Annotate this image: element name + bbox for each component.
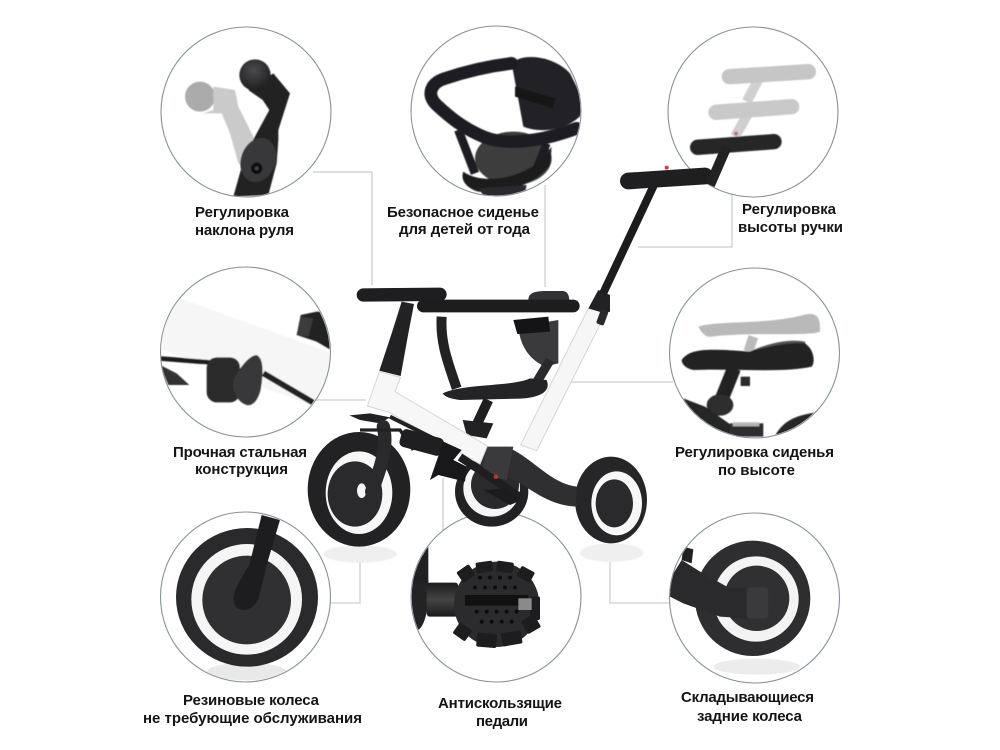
handlebar: [363, 274, 440, 315]
label: rubber wheels: не требующие обслуживания: [143, 710, 362, 727]
panel: seat height adjustment: [670, 268, 840, 479]
circle: handlebar tilt: [161, 27, 331, 197]
push pole tube: [521, 308, 606, 451]
middle wheel: [455, 457, 528, 527]
label: handlebar tilt: Регулировка: [195, 204, 290, 221]
label: steel frame: [173, 444, 307, 478]
seat back: [513, 291, 569, 385]
label: safe seat: [387, 204, 539, 238]
seat stem: [463, 400, 493, 438]
pedal and linkage: [398, 428, 522, 505]
circle: steel frame: [157, 267, 337, 437]
front fork: [349, 413, 440, 492]
main illustration: tricycle: [308, 176, 705, 563]
label: handlebar tilt: наклона руля: [195, 222, 294, 239]
label: safe seat: для детей от года: [399, 221, 531, 238]
label: handlebar tilt: [195, 204, 294, 239]
panel: rubber wheels: [143, 512, 362, 727]
label: rear wheels: [681, 689, 814, 725]
label: handle height: Регулировка: [742, 201, 837, 218]
circle: rear wheel: [667, 513, 840, 683]
label: steel frame: Прочная стальная: [173, 444, 307, 461]
label: rear wheels: задние колеса: [697, 708, 803, 725]
push pole: [588, 185, 654, 326]
rear wheel: [575, 457, 647, 543]
steering column: [379, 302, 414, 376]
panel: folding rear wheels: [667, 513, 840, 725]
seat base: [443, 378, 548, 400]
label: seat height: Регулировка сиденья: [675, 444, 834, 461]
label: safe seat: Безопасное сиденье: [387, 204, 539, 221]
label: seat height: [675, 444, 834, 479]
circle: safe seat: [411, 26, 587, 200]
wheel shadows: [323, 543, 643, 563]
rear frame arm: [477, 447, 577, 507]
main handle bar: [628, 176, 705, 181]
label: rubber wheels: [143, 692, 362, 727]
panel: handle height adjustment: [668, 27, 843, 236]
label: seat height: по высоте: [718, 462, 795, 479]
label: handle height: [738, 201, 843, 236]
label: rear wheels: Складывающиеся: [681, 689, 814, 706]
panel: handlebar tilt adjustment: [161, 27, 331, 239]
label: pedals: педали: [476, 713, 528, 730]
raised handle stem and red dot: [665, 147, 727, 185]
circle: pedal: [405, 512, 581, 682]
white frame: [367, 372, 487, 464]
label: steel frame: конструкция: [195, 461, 288, 478]
circle: handle height: [668, 27, 838, 197]
panel: anti-slip pedals: [405, 512, 581, 730]
seat bar: [423, 306, 573, 388]
label: rubber wheels: Резиновые колеса: [183, 692, 320, 709]
front wheel: [308, 432, 410, 547]
rear hub block: [482, 447, 513, 480]
label: handle height: высоты ручки: [738, 219, 843, 236]
panel: safe seat: [387, 26, 587, 238]
connector lines: [310, 172, 732, 603]
circle: seat height: [670, 268, 840, 441]
label: pedals: Антискользящие: [438, 695, 562, 712]
panel: steel frame: [157, 267, 337, 478]
circle: rubber wheel: [160, 512, 330, 682]
label: pedals: [438, 695, 562, 730]
